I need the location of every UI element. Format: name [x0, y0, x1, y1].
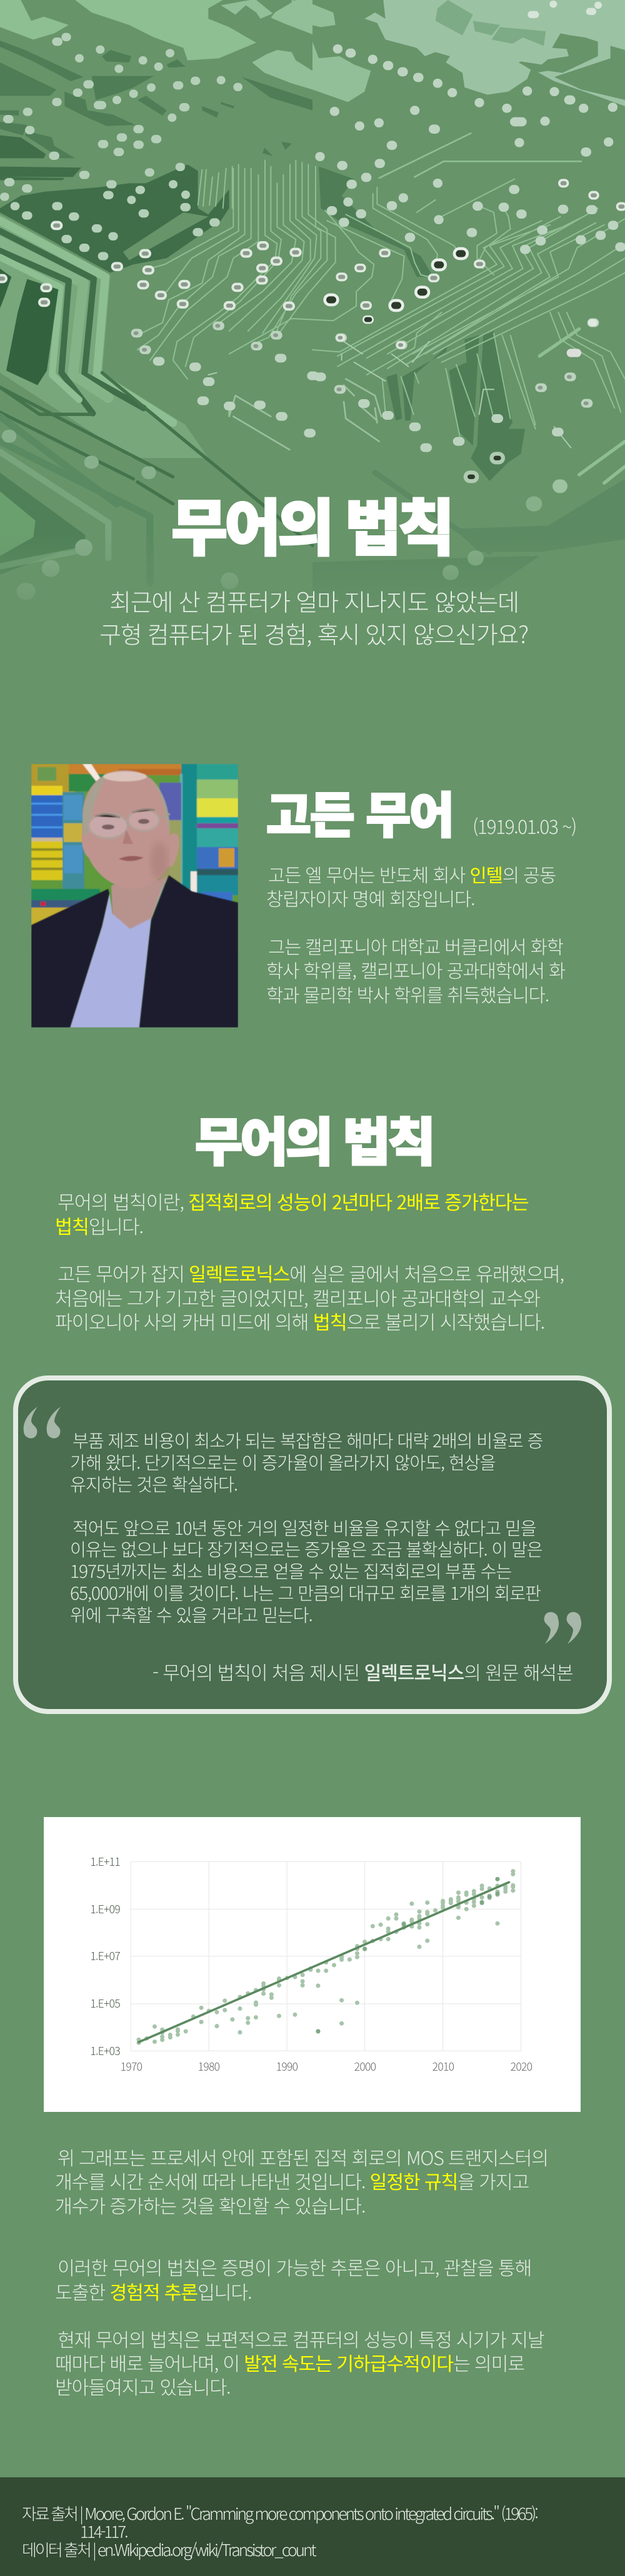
- lower right wide traces: [312, 331, 625, 610]
- icon: closing quote mark: [544, 1612, 581, 1644]
- quote text: [70, 1427, 542, 1627]
- x axis labels: 2010: [432, 2059, 454, 2074]
- shirt: [70, 876, 168, 1028]
- y axis labels: 1.E+09: [90, 1901, 120, 1917]
- x axis labels: [121, 2059, 532, 2074]
- quote text: 부품 제조 비용이 최소가 되는 복잡함은 해마다 대략 2배의 비율로 증: [72, 1427, 542, 1453]
- y axis labels: 1.E+03: [90, 2043, 120, 2059]
- hero: circuit board background: [0, 0, 625, 600]
- attribution: - 무어의 법칙이 처음 제시된 일렉트로닉스의 원문 해석본: [152, 1658, 573, 1685]
- text: Moore biography: 고든 엘 무어는 반도체 회사 인텔의 공동: [268, 861, 556, 888]
- text: Moore biography: 학과 물리학 박사 학위를 취득했습니다.: [266, 981, 549, 1008]
- quote text: 유지하는 것은 확실하다.: [70, 1471, 238, 1497]
- x axis labels: 2020: [511, 2059, 532, 2074]
- head: [82, 770, 179, 888]
- subtitle: 최근에 산 컴퓨터가 얼마 지나지도 않았는데: [109, 583, 519, 618]
- text: definition of Moore's law: 법칙입니다.: [55, 1212, 143, 1239]
- neck: [111, 876, 166, 929]
- chip background: [31, 764, 238, 951]
- text: Moore biography: 학사 학위를, 캘리포니아 공과대학에서 화: [266, 956, 565, 983]
- text: chart explanation: 받아들여지고 있습니다.: [55, 2372, 230, 2400]
- text: chart explanation: 개수가 증가하는 것을 확인할 수 있습니다.: [55, 2191, 365, 2219]
- source text: 자료 출처 | Moore, Gordon E. "Cramming more components onto integrated circuits." (1965):: [22, 2502, 537, 2525]
- text: Moore biography: 그는 캘리포니아 대학교 버클리에서 화학: [268, 933, 563, 959]
- board top light areas: [0, 0, 625, 106]
- text: Moore biography: 창립자이자 명예 회장입니다.: [266, 884, 474, 911]
- text: chart explanation: 도출한 경험적 추론입니다.: [55, 2277, 251, 2305]
- plot: [130, 1861, 521, 2051]
- text: Moore biography: [266, 861, 565, 1008]
- x axis labels: 1990: [276, 2059, 298, 2074]
- subtitle: 구형 컴퓨터가 된 경험, 혹시 있지 않으신가요?: [99, 616, 528, 650]
- quote text: 위에 구축할 수 있을 거라고 믿는다.: [70, 1602, 312, 1627]
- y axis labels: 1.E+05: [90, 1996, 120, 2011]
- panel: quote box: [13, 1375, 612, 1714]
- circuit traces: [138, 133, 625, 483]
- text: definition of Moore's law: 처음에는 그가 기고한 글이었지만, 캘리포니아 공과대학의 교수와: [55, 1284, 540, 1311]
- icon: opening quote mark: [24, 1407, 61, 1439]
- text: chart explanation: 때마다 배로 늘어나며, 이 발전 속도는 기하급수적이다는 의미로: [55, 2349, 524, 2376]
- title: 무어의 법칙: [171, 479, 451, 568]
- text: definition of Moore's law: 고든 무어가 잡지 일렉트로닉스에 실은 글에서 처음으로 유래했으며,: [58, 1259, 564, 1287]
- source text: [22, 2502, 538, 2561]
- text: definition of Moore's law: [55, 1187, 564, 1335]
- scatter chart: transistor count: [90, 1854, 532, 2074]
- quote text: 1975년까지는 최소 비용으로 얻을 수 있는 집적회로의 부품 수는: [70, 1558, 511, 1583]
- heading: Gordon Moore: 고든 무어: [266, 777, 453, 847]
- source text: 114-117.: [80, 2520, 127, 2543]
- x axis labels: 1970: [121, 2059, 142, 2074]
- quote text: 이유는 없으나 보다 장기적으로는 증가율은 조금 불확실하다. 이 말은: [70, 1536, 542, 1562]
- photo: portrait of Gordon Moore: [31, 764, 238, 1028]
- text: chart explanation: [55, 2143, 548, 2400]
- board dark areas: [0, 41, 433, 277]
- text: chart explanation: 이러한 무어의 법칙은 증명이 가능한 추론은 아니고, 관찰을 통해: [58, 2253, 531, 2281]
- footer: sources: [0, 2477, 625, 2576]
- jacket: [31, 875, 238, 1028]
- x axis labels: 2000: [354, 2059, 376, 2074]
- chevron traces lower left: [0, 214, 312, 604]
- x axis labels: 1980: [198, 2059, 220, 2074]
- y axis labels: 1.E+11: [90, 1854, 120, 1870]
- subtitle: [99, 583, 528, 650]
- y axis labels: 1.E+07: [90, 1948, 120, 1964]
- text: chart explanation: 위 그래프는 프로세서 안에 포함된 집적 회로의 MOS 트랜지스터의: [58, 2143, 548, 2171]
- panel: chart: [44, 1817, 581, 2112]
- text: chart explanation: 현재 무어의 법칙은 보편적으로 컴퓨터의 성능이 특정 시기가 지날: [58, 2325, 544, 2352]
- heading: Moore's law: 무어의 법칙: [195, 1101, 433, 1176]
- quote text: 적어도 앞으로 10년 동안 거의 일정한 비율을 유지할 수 없다고 믿을: [72, 1515, 536, 1540]
- dates: (1919.01.03 ~): [472, 812, 576, 840]
- text: definition of Moore's law: 무어의 법칙이란, 집적회로의 성능이 2년마다 2배로 증가한다는: [58, 1187, 528, 1215]
- fade to background: [0, 533, 625, 625]
- source text: 데이터 출처 | en.Wikipedia.org/wiki/Transistor_count: [22, 2538, 315, 2561]
- pads: [0, 37, 622, 592]
- text: definition of Moore's law: 파이오니아 사의 카버 미드에 의해 법칙으로 불리기 시작했습니다.: [55, 1307, 544, 1335]
- quote text: 65,000개에 이를 것이다. 나는 그 만큼의 대규모 회로를 1개의 회로판: [70, 1580, 541, 1605]
- quote text: 가해 왔다. 단기적으로는 이 증가율이 올라가지 않아도, 현상을: [70, 1449, 495, 1475]
- text: chart explanation: 개수를 시간 순서에 따라 나타낸 것입니다. 일정한 규칙을 가지고: [55, 2167, 529, 2194]
- y axis labels: [90, 1854, 120, 2059]
